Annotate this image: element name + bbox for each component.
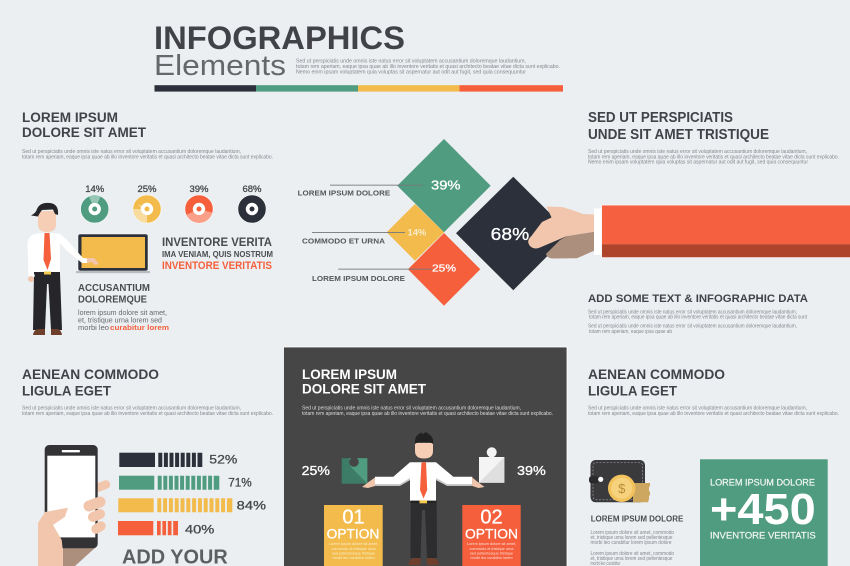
option card: 01: OPTION	[327, 526, 379, 541]
header description	[296, 58, 560, 76]
header description: Nemo enim ipsam voluptatem quia voluptas sit aspernatur aut odit aut fugit, sed quia consequuntur	[296, 70, 526, 76]
diamond: 14%	[387, 204, 444, 261]
diamond: 14%: 14%	[408, 228, 426, 238]
fingers front	[89, 502, 100, 506]
icon: green puzzle piece	[342, 457, 367, 484]
callout: accusantium: lorem ipsum dolore sit amet,	[78, 308, 167, 317]
heading	[22, 367, 159, 399]
description: Sed ut perspiciatis unde omnis iste natus error sit voluptatem accusantium doloremque laudantium,	[588, 149, 807, 155]
text block: lorem ipsum dolore	[590, 515, 684, 566]
donut: 14%	[80, 184, 109, 223]
pants	[33, 274, 62, 330]
diamond: 68%: 68%	[491, 224, 529, 244]
description: Sed ut perspiciatis unde omnis iste natus error sit voluptatem accusantium doloremque laudantium,	[588, 324, 797, 330]
coin stack	[633, 483, 650, 502]
label: lorem ipsum dolore lower	[312, 269, 432, 283]
hands	[87, 258, 99, 265]
icon: wallet and coins	[589, 460, 650, 502]
icon: white puzzle piece	[479, 447, 504, 483]
panel: bottom right wallet	[588, 367, 839, 566]
callout: accusantium: et, tristique urna lorem sed	[78, 316, 162, 324]
callout: +450 green card: INVENTORE VERITATIS	[710, 530, 816, 540]
tie	[420, 462, 427, 498]
option card: 02: commodo et,tristique urna	[470, 547, 514, 551]
option card: 02	[462, 505, 521, 566]
bar: 84%	[118, 498, 266, 513]
stat: 39%: 39%	[517, 464, 546, 478]
callout: +450 green card: LOREM IPSUM DOLORE	[710, 478, 815, 488]
bar: 71%: 71%	[228, 476, 252, 490]
heading: UNDE SIT AMET TRISTIQUE	[588, 127, 769, 143]
diamond: 39%	[397, 139, 491, 232]
option card: 01: Lorem ipsum dolore sit amet,	[329, 542, 378, 546]
shirt	[28, 233, 88, 277]
heading: DOLORE SIT AMET	[302, 382, 427, 397]
text block: lorem ipsum dolore: Lorem ipsum dolore sit amet, commodo	[590, 551, 674, 557]
label: lorem ipsum dolore: LOREM IPSUM DOLORE	[298, 188, 390, 197]
hair	[415, 432, 433, 444]
bar: 52%: 52%	[209, 452, 238, 466]
diamond: 68%	[456, 177, 570, 290]
callout: accusantium: ACCUSANTIUM	[78, 282, 150, 294]
donut: 25%	[133, 184, 161, 223]
hair	[31, 203, 58, 216]
description: Nemo enim ipsam voluptatem quia voluptas sit aspernatur aut odit aut fugit, sed quia consequuntur	[588, 160, 808, 166]
callout: +450 green card	[700, 459, 828, 566]
pants	[410, 503, 437, 558]
panel: bottom left phone chart	[22, 367, 273, 566]
phone	[45, 445, 98, 548]
icon: hand holding phone	[38, 445, 106, 566]
stat: 25%: 25%	[302, 464, 330, 478]
diamond: 25%	[408, 233, 480, 306]
title: INFOGRAPHICS	[154, 20, 405, 56]
diamond: 39%: 39%	[431, 178, 461, 193]
heading	[588, 110, 769, 143]
description: Sed ut perspiciatis unde omnis iste natus error sit voluptatem accusantium doloremque laudantium,	[22, 149, 241, 155]
option card: 02: sed pellentesque tristique	[470, 552, 513, 556]
option card: 01	[324, 505, 383, 566]
sleeve shade	[63, 547, 96, 566]
heading: AENEAN COMMODO	[588, 367, 725, 382]
donut: 39%: 39%	[189, 184, 209, 195]
description: Sed ut perspiciatis unde omnis iste natus error sit voluptatem accusantium doloremque laudantium,	[302, 405, 521, 411]
label: commodo et urna	[302, 232, 405, 245]
head	[415, 443, 433, 458]
bar: 40%	[118, 521, 215, 536]
donut: 68%: 68%	[242, 184, 262, 195]
bar: 52%	[119, 452, 238, 467]
description	[302, 405, 553, 417]
description: totam rem aperiam, eaque ipsa quae ab illo inventore veritatis et quasi architecto beatae vitae dicta sunt explicabo.	[588, 411, 839, 417]
header: title block	[154, 20, 563, 92]
subtitle: Elements	[154, 50, 286, 82]
donut: 68%	[238, 184, 266, 223]
description: totam rem aperiam, eaque ipsa quae ab illo inventore veritatis et quasi architecto beatae vitae dicta sunt explicabo.	[588, 154, 839, 160]
text block: lorem ipsum dolore: LOREM IPSUM DOLORE	[591, 515, 684, 524]
heading: LIGULA EGET	[588, 384, 678, 399]
description	[588, 149, 839, 166]
belt	[410, 501, 436, 503]
heading	[302, 367, 427, 397]
description: totam rem aperiam, eaque ipsa quae ab illo inventore veritatis et quasi architecto beatae vitae dicta sunt explicabo.	[302, 411, 553, 417]
description	[588, 406, 839, 417]
chart: diamond percentages	[298, 139, 570, 306]
description: totam rem aperiam, eaque ipsa quae ab	[589, 329, 672, 335]
description	[588, 310, 808, 335]
fingers behind	[97, 484, 106, 488]
description	[22, 149, 273, 160]
heading: ADD SOME TEXT & INFOGRAPHIC DATA	[588, 293, 808, 305]
donut: 25%: 25%	[137, 184, 157, 195]
bar: 40%: 40%	[185, 522, 215, 536]
description: Sed ut perspiciatis unde omnis iste natus error sit voluptatem accusantium doloremque laudantium,	[588, 406, 807, 412]
callout: +450 green card: +450	[710, 485, 816, 534]
text block: lorem ipsum dolore: Lorem ipsum dolore sit amet, commodo	[590, 530, 674, 536]
callout: inventore verita: IMA VENIAM, QUIS NOSTRUM	[162, 249, 273, 259]
description: totam rem aperiam, eaque ipsa quae ab illo inventore veritatis et quasi architecto beatae vitae dicta sunt	[589, 315, 808, 321]
hand	[528, 206, 594, 248]
option card: 02: 02	[480, 506, 503, 528]
heading: SED UT PERSPICIATIS	[588, 110, 733, 126]
description	[22, 406, 273, 417]
text block: lorem ipsum dolore: morbi leo curabitur lorem ipsum dolore	[590, 540, 672, 546]
donut: 39%	[185, 184, 213, 223]
icon: businessman presenting	[28, 203, 99, 335]
label: lorem ipsum dolore lower: LOREM IPSUM DOLORE	[312, 274, 405, 283]
heading: LIGULA EGET	[22, 384, 112, 399]
four colour bar	[154, 85, 563, 92]
description: totam rem aperiam, eaque ipsa quae ab illo inventore veritatis et quasi architecto beatae vitae dicta sunt explicabo.	[22, 154, 273, 160]
description: Sed ut perspiciatis unde omnis iste natus error sit voluptatem accusantium doloremque laudantium,	[22, 406, 241, 412]
panel: top right heading	[588, 110, 839, 166]
heading: DOLORE SIT AMET	[22, 125, 147, 140]
callout: inventore verita	[162, 237, 273, 272]
panel: top left lorem ipsum	[22, 110, 273, 335]
icon: businessman balancing	[362, 432, 484, 565]
callout: accusantium: morbi leo	[78, 323, 109, 332]
callout: accusantium	[78, 282, 169, 332]
label: commodo et urna: COMMODO ET URNA	[302, 236, 386, 245]
heading: AENEAN COMMODO	[22, 367, 159, 382]
heading: LOREM IPSUM	[302, 367, 397, 382]
panel: dark centre options	[284, 347, 567, 566]
donut: 14%: 14%	[85, 184, 105, 195]
heading	[588, 367, 725, 399]
option card: 01: commodo et,tristique urna	[332, 547, 376, 551]
header description: totam rem aperiam, eaque ipsa quae ab illo inventore veritatis et quasi architecto beatae vitae dicta sunt explicabo.	[296, 64, 560, 70]
icon: pointing hand with sleeve	[528, 205, 850, 258]
head	[38, 211, 56, 232]
hand shadow	[546, 232, 594, 258]
bar: 71%	[119, 476, 252, 490]
tie	[44, 233, 51, 270]
option card: 02: morbi leo curabitur lorem	[470, 556, 512, 560]
sleeve	[602, 205, 850, 258]
callout: inventore verita: INVENTORE VERITA	[162, 237, 272, 249]
heading: LOREM IPSUM	[22, 110, 118, 125]
callout: accusantium: curabitur lorem	[110, 323, 169, 332]
bar: 84%: 84%	[237, 499, 266, 513]
description: Sed ut perspiciatis unde omnis iste natus error sit voluptatem accusantium doloremque laudantium,	[588, 310, 797, 316]
coin	[608, 475, 635, 502]
panel: add some text	[588, 293, 808, 335]
belt	[34, 272, 60, 274]
option card: 02: Lorem ipsum dolore sit amet,	[467, 542, 516, 546]
arm shade	[375, 478, 472, 486]
option card: 01: morbi leo curabitur lorem	[332, 556, 374, 560]
palm	[38, 508, 68, 566]
shoes	[33, 329, 62, 335]
heading	[22, 110, 147, 140]
option card: 01: 01	[342, 506, 365, 528]
text block: lorem ipsum dolore: et, tristique urna lorem sed pellentesque	[590, 556, 673, 562]
icon: laptop	[76, 234, 150, 273]
diamond: 25%: 25%	[432, 262, 456, 274]
label: lorem ipsum dolore	[298, 185, 423, 197]
text block: lorem ipsum dolore: et, tristique urna lorem sed pellentesque	[590, 535, 673, 541]
icon: wallet and coins: $	[618, 481, 626, 496]
header description: Sed ut perspiciatis unde omnis iste natus error sit voluptatem accusantium doloremque laudantium,	[296, 58, 526, 64]
description: totam rem aperiam, eaque ipsa quae ab illo inventore veritatis et quasi architecto beatae vitae dicta sunt explicabo.	[22, 411, 273, 417]
panel background	[284, 347, 567, 566]
option card: 01: sed pellentesque tristique	[332, 552, 375, 556]
hands	[362, 478, 484, 488]
cuff	[594, 208, 601, 255]
option card: 02: OPTION	[465, 526, 518, 541]
callout: accusantium: DOLOREMQUE	[78, 294, 147, 306]
shirt and arms	[375, 462, 472, 501]
shoes	[408, 558, 439, 565]
callout: inventore verita: INVENTORE VERITATIS	[162, 260, 272, 272]
